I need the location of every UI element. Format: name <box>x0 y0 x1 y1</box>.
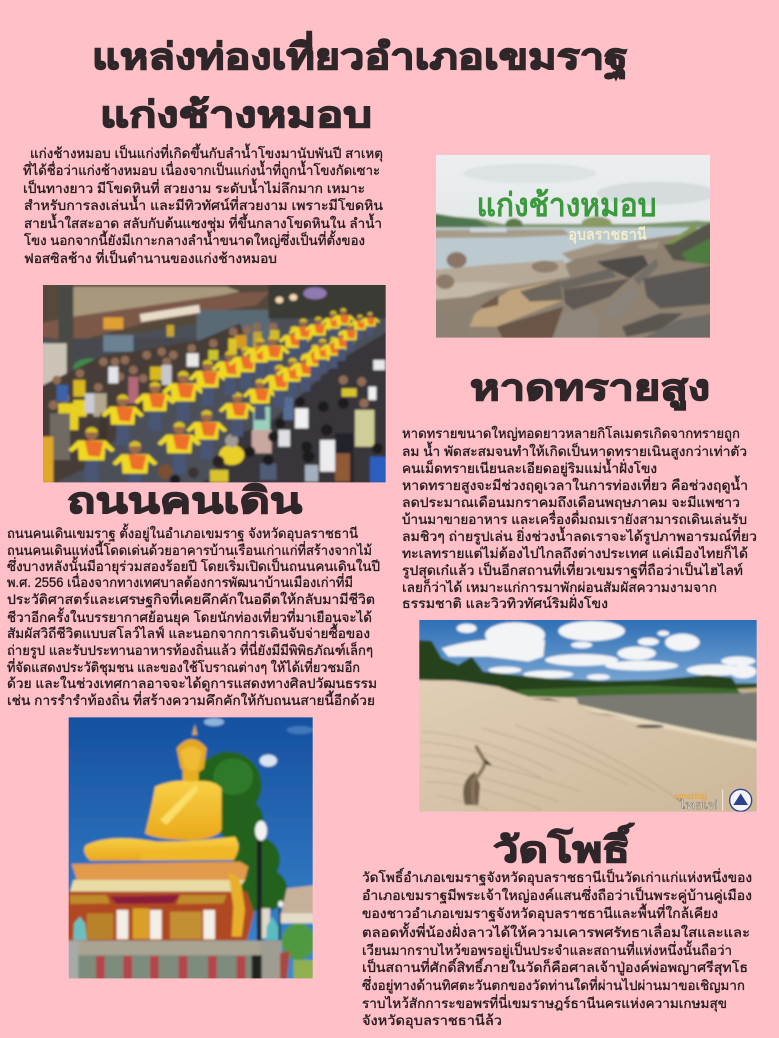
driftwood <box>463 746 492 805</box>
statue <box>192 724 197 735</box>
text block: Hat Sai Sung <box>402 425 757 611</box>
text block: Wat Pho: ราบไหว้สักการะขอพรที่นี่เขมราษฎร์ธานีนครแห่งความเกษมสุข <box>362 994 727 1012</box>
text block: Hat Sai Sung: หาดทรายสูงจะมีช่วงฤดูเวลาในการท่องเที่ยว คือช่วงฤดูน้ำ <box>402 475 748 494</box>
photo: walking street dancers <box>40 282 390 495</box>
text block: Wat Pho: เวียนมากราบไหว้ขอพรอยู่เป็นประจำและสถานที่แห่งหนึ่งนั้นถือว่า <box>362 940 732 959</box>
text block: Hat Sai Sung: หาดทรายขนาดใหญ่ทอดยาวหลายกิโลเมตรเกิดจากทรายถูก <box>402 425 740 442</box>
text block: Wat Pho <box>362 867 752 1029</box>
logo: amazing Thailand: ไทยเท่ <box>677 798 718 812</box>
text block: Wat Pho: จังหวัดอุบลราชธานีล้ว <box>362 1013 502 1029</box>
text block: Kaeng Chang Mop: เป็นทางยาว มีโขดหินที่ สวยงาม ระดับน้ำไม่ลึกมาก เหมาะ <box>23 178 365 196</box>
photo: Hat Sai Sung dune and river <box>417 617 760 815</box>
text block: Wat Pho: ของชาวอำเภอเขมราฐจังหวัดอุบลราชธานีและพื้นที่ใกล้เคียง <box>362 903 718 922</box>
text block: Wat Pho: วัดโพธิ์อำเภอเขมราฐจังหวัดอุบลราชธานีเป็นวัดเก่าแก่แห่งหนึ่งของ <box>362 867 752 886</box>
text block: walking street: ชีวาอีกครั้งในบรรยากาศย้อนยุค โดยนักท่องเที่ยวที่มาเยือนจะได้ <box>7 607 372 626</box>
text block: walking street: ถนนคนเดินแห่งนี้โดดเด่นด้วยอาคารบ้านเรือนเก่าแก่ที่สร้างจากไม้ <box>7 540 372 558</box>
text block: Kaeng Chang Mop: สำหรับการลงเล่นน้ำ และมีทิวทัศน์ที่สวยงาม เพราะมีโขดหิน <box>24 195 383 213</box>
photo: Kaeng Chang Mop rocks <box>433 152 717 340</box>
crowd left <box>40 323 247 483</box>
logo: amazing Thailand: amazing <box>674 791 707 801</box>
text block: walking street: ที่จัดแสดงประวัติชุมชน และของใช้โบราณต่างๆ ให้ได้เที่ยวชมอีก <box>7 658 360 676</box>
text block: walking street: ถนนคนเดินเขมราฐ ตั้งอยู่ในอำเภอเขมราฐ จังหวัดอุบลราชธานี <box>7 523 358 542</box>
text block: Kaeng Chang Mop: ฟอสซิลช้าง ที่เป็นตำนานของแก่งช้างหมอบ <box>24 249 277 266</box>
lotus pedestal <box>72 862 248 880</box>
text block: Kaeng Chang Mop: แก่งช้างหมอบ เป็นแก่งที่เกิดขึ้นกับลำน้ำโขงมานับพันปี สาเหตุ <box>30 143 383 162</box>
text block: Hat Sai Sung: เลยก็ว่าได้ เหมาะแก่การมาพักผ่อนสัมผัสความงามจาก <box>402 578 717 595</box>
title: แหล่งท่องเที่ยวอำเภอเขมราฐ <box>92 31 628 80</box>
text block: walking street: สัมผัสวิถีชีวิตแบบสโลว์ไลฟ์ และนอกจากการเดินจับจ่ายซื้อของ <box>7 623 370 641</box>
heading: Hat Sai Sung: หาดทรายสูง <box>470 367 710 411</box>
photo caption: Kaeng Chang Mop: แก่งช้างหมอบ <box>477 187 657 223</box>
lamp post <box>257 832 262 942</box>
text block: Hat Sai Sung: คนเม็ดทรายเนียนละเอียดอยู่ริมแม่น้ำฝั่งโขง <box>402 458 657 477</box>
text block: walking street <box>7 523 380 708</box>
text block: walking street: ถ่ายรูป และรับประทานอาหารท้องถิ่นแล้ว ที่นี่ยังมีมีพิพิธภัณฑ์เล็กๆ <box>7 641 373 659</box>
photo: golden Buddha statue <box>65 713 317 982</box>
text block: walking street: ประวัติศาสตร์และเศรษฐกิจที่เคยคึกคักในอดีตให้กลับมามีชีวิต <box>7 590 375 608</box>
stone railing <box>65 941 282 955</box>
heading: Kaeng Chang Mop: แก่งช้างหมอบ <box>100 94 372 135</box>
text block: Kaeng Chang Mop: สายน้ำใสสะอาด สลับกับต้นแซงชุ่ม ที่ขึ้นกลางโขดหินใน ลำน้ำ <box>24 213 382 232</box>
right side building <box>280 884 313 915</box>
text block: Hat Sai Sung: ลม น้ำ พัดสะสมจนทำให้เกิดเป็นหาดทรายเนินสูงกว่าเท่าตัว <box>402 441 747 460</box>
text block: Hat Sai Sung: ลมชิวๆ ถ่ายรูปเล่น ยิ่งช่วงน้ำลดเราจะได้รูปภาพอารมณ์ที่ยว <box>402 526 757 545</box>
tree behind statue <box>195 752 287 913</box>
text block: Hat Sai Sung: รูปสุดเก๋แล้ว เป็นอีกสถานที่เที่ยวเขมราฐที่ถือว่าเป็นไฮไลท์ <box>402 561 743 579</box>
text block: walking street: เช่น การรำรำท้องถิ่น ที่สร้างความคึกคักให้กับถนนสายนี้อีกด้วย <box>7 690 375 708</box>
heading: walking street: ถนนคนเดิน <box>67 480 303 521</box>
text block: Hat Sai Sung: บ้านมาขายอาหาร และเครื่องดื่มถมเรายังสามารถเดินเล่นรับ <box>402 510 747 527</box>
crowd right <box>197 330 390 485</box>
text block: walking street: ซึ่งบางหลังนั้นมีอายุร่วมสองร้อยปี โดยเริ่มเปิดเป็นถนนคนเดินในปี <box>7 556 380 575</box>
dancers <box>68 308 380 495</box>
text block: Kaeng Chang Mop: ที่ได้ชื่อว่าแก่งช้างหมอบ เนื่องจากเป็นแก่งน้ำที่ถูกน้ำโขงกัดเซาะ <box>23 160 380 179</box>
text block: Hat Sai Sung: ธรรมชาติ และวิวทิวทัศน์ริมฝั่งโขง <box>402 594 608 611</box>
text block: walking street: พ.ศ. 2556 เนื่องจากทางเทศบาลต้องการพัฒนาบ้านเมืองเก่าที่มี <box>7 573 353 590</box>
text block: Wat Pho: ตลอดทั้งพี่น้องฝั่งลาวได้ให้ความเคารพศรัทธาเลื่อมใสและและ <box>362 922 750 940</box>
text block: Hat Sai Sung: ลดประมาณเดือนมกราคมถึงเดือนพฤษภาคม จะมีแพชาว <box>402 495 740 510</box>
text block: walking street: ด้วย และในช่วงเทศกาลอาจจะได้ดูการแสดงทางศิลปวัฒนธรรม <box>7 675 377 692</box>
text block: Wat Pho: อำเภอเขมราฐมีพระเจ้าใหญ่องค์แสนซึ่งถือว่าเป็นพระคู่บ้านคู่เมือง <box>362 886 752 904</box>
logo: amazing Thailand <box>674 789 752 812</box>
heading: Wat Pho: วัดโพธิ์ <box>493 823 635 870</box>
text block: Wat Pho: เป็นสถานที่ศักดิ์สิทธิ์ภายในวัดก็คือศาลเจ้าปู่องค์พ่อพญาศรีสุทโธ <box>362 957 748 976</box>
text block: Kaeng Chang Mop: โขง นอกจากนี้ยังมีเกาะกลางลำน้ำขนาดใหญ่ซึ่งเป็นที่ตั้งของ <box>24 230 365 248</box>
text block: Kaeng Chang Mop <box>23 143 383 266</box>
photo caption: Ubon Ratchathani: อุบลราชธานี <box>568 226 647 244</box>
text block: Hat Sai Sung: ทะเลทรายแต่ไม่ต้องไปไกลถึงต่างประเทศ แค่เมืองไทยก็ได้ <box>402 544 748 561</box>
text block: Wat Pho: ซึ่งอยู่ทางด้านทิศตะวันตกของวัดท่านใดที่ผ่านไปผ่านมาขอเชิญมาก <box>362 976 745 994</box>
